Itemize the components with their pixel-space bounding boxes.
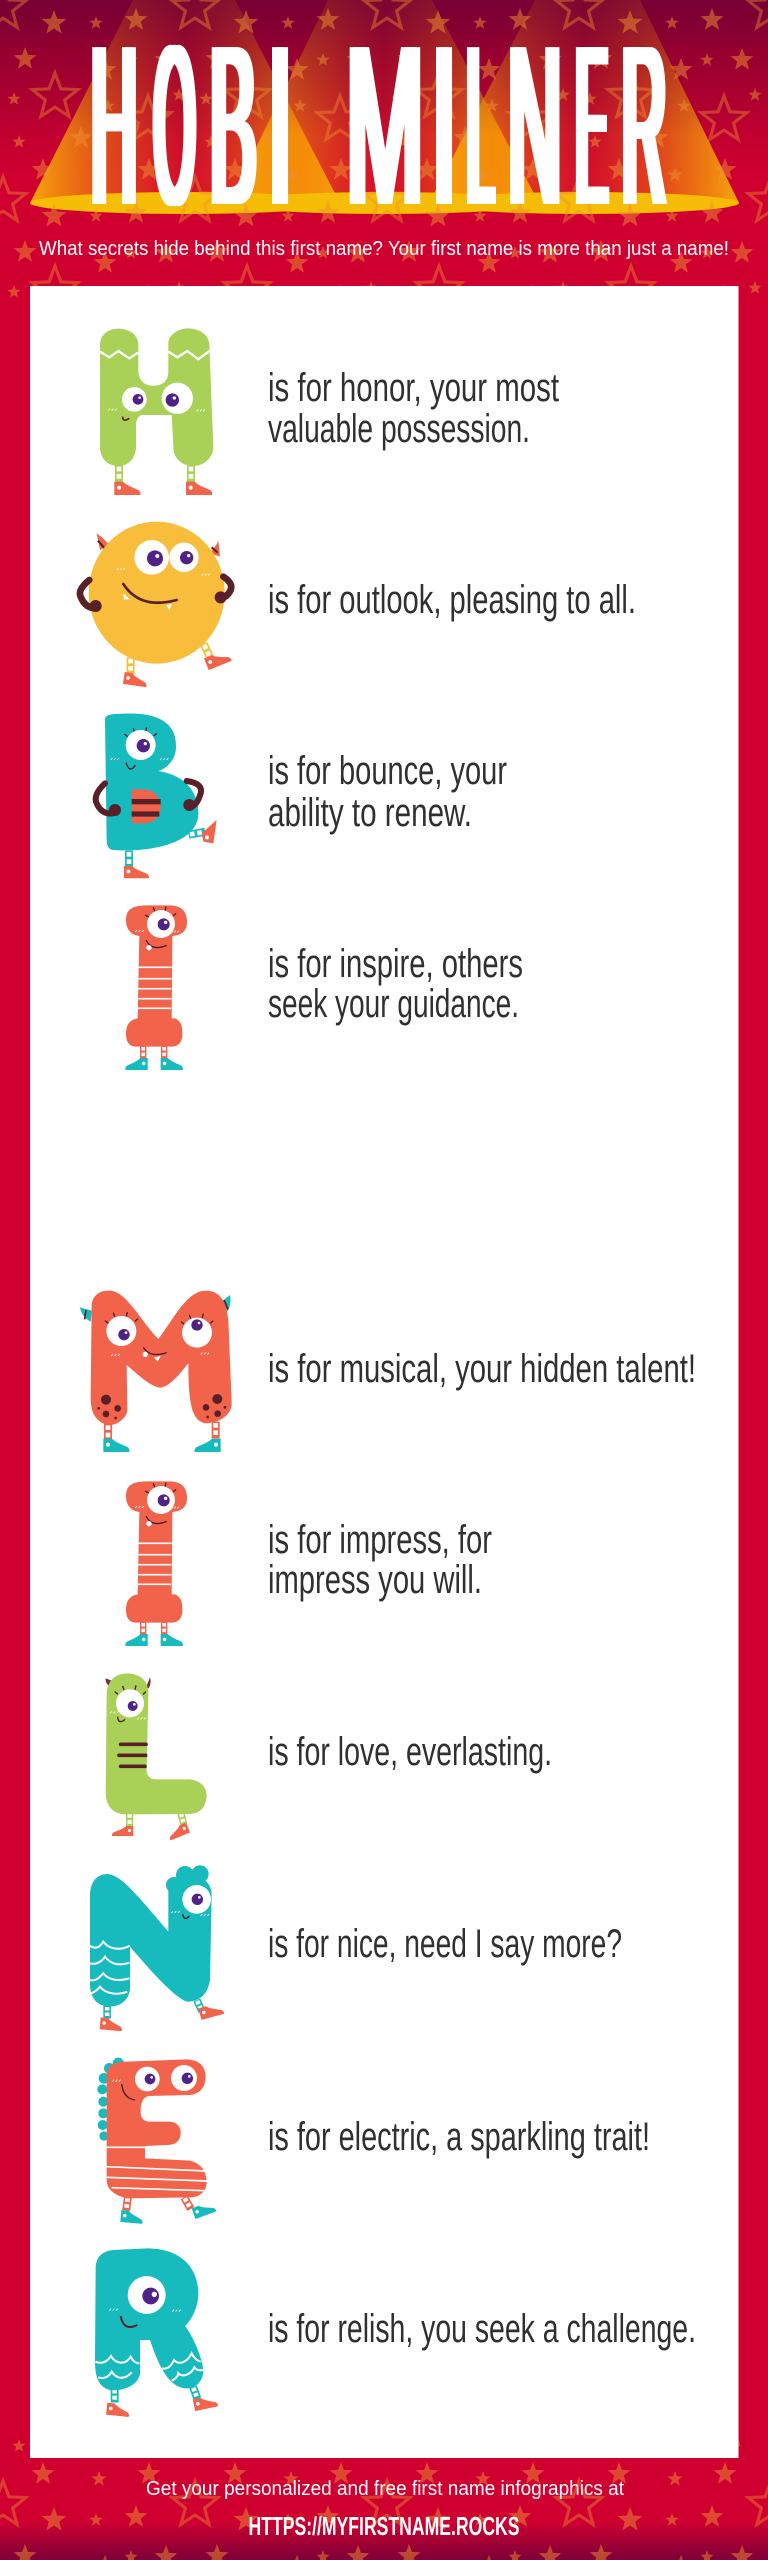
monster letter L: [106, 1673, 207, 1840]
monster letter R: [95, 2248, 218, 2417]
title: H: [91, 0, 137, 253]
text: N: is for nice, need I say more?: [268, 1922, 622, 1966]
text: H: [268, 366, 559, 451]
title: N: [508, 0, 562, 253]
title: I: [268, 0, 292, 253]
monster letter B: [96, 714, 217, 878]
text: I: seek your guidance.: [268, 982, 519, 1026]
monster letter I: [125, 905, 187, 1070]
title: M: [346, 0, 424, 253]
text: O: is for outlook, pleasing to all.: [268, 578, 636, 622]
text: I second: impress you will.: [268, 1558, 482, 1602]
title: B: [210, 0, 257, 253]
text: I: [268, 942, 523, 1026]
title: I: [432, 0, 456, 253]
title: O: [154, 0, 195, 253]
monster letter H: [100, 328, 213, 495]
title: R: [622, 0, 666, 253]
footer url: HTTPS://MYFIRSTNAME.ROCKS: [248, 2511, 520, 2541]
title: E: [576, 0, 607, 253]
text: B: is for bounce, your: [268, 749, 507, 793]
monster letter N: [89, 1865, 224, 2031]
text: B: [268, 749, 507, 835]
text: I: is for inspire, others: [268, 942, 523, 986]
panel: white content: [30, 286, 738, 2458]
monster letter I (second): [125, 1481, 187, 1646]
text: B: ability to renew.: [268, 791, 472, 835]
text: L: is for love, everlasting.: [268, 1730, 552, 1774]
monster letter M: [80, 1291, 232, 1452]
title: L: [467, 0, 494, 253]
text: I second: is for impress, for: [268, 1518, 492, 1562]
title: [91, 0, 668, 253]
monster letter E: [97, 2058, 217, 2224]
spotlights: [0, 0, 768, 214]
text: H: is for honor, your most: [268, 366, 559, 410]
text: I second: [268, 1518, 492, 1602]
footer text: Get your personalized and free first name infographics at: [146, 2478, 624, 2500]
subtitle: What secrets hide behind this first name? Your first name is more than just a name!: [39, 238, 729, 260]
text: H: valuable possession.: [268, 407, 530, 451]
monster letter O: [80, 522, 232, 687]
